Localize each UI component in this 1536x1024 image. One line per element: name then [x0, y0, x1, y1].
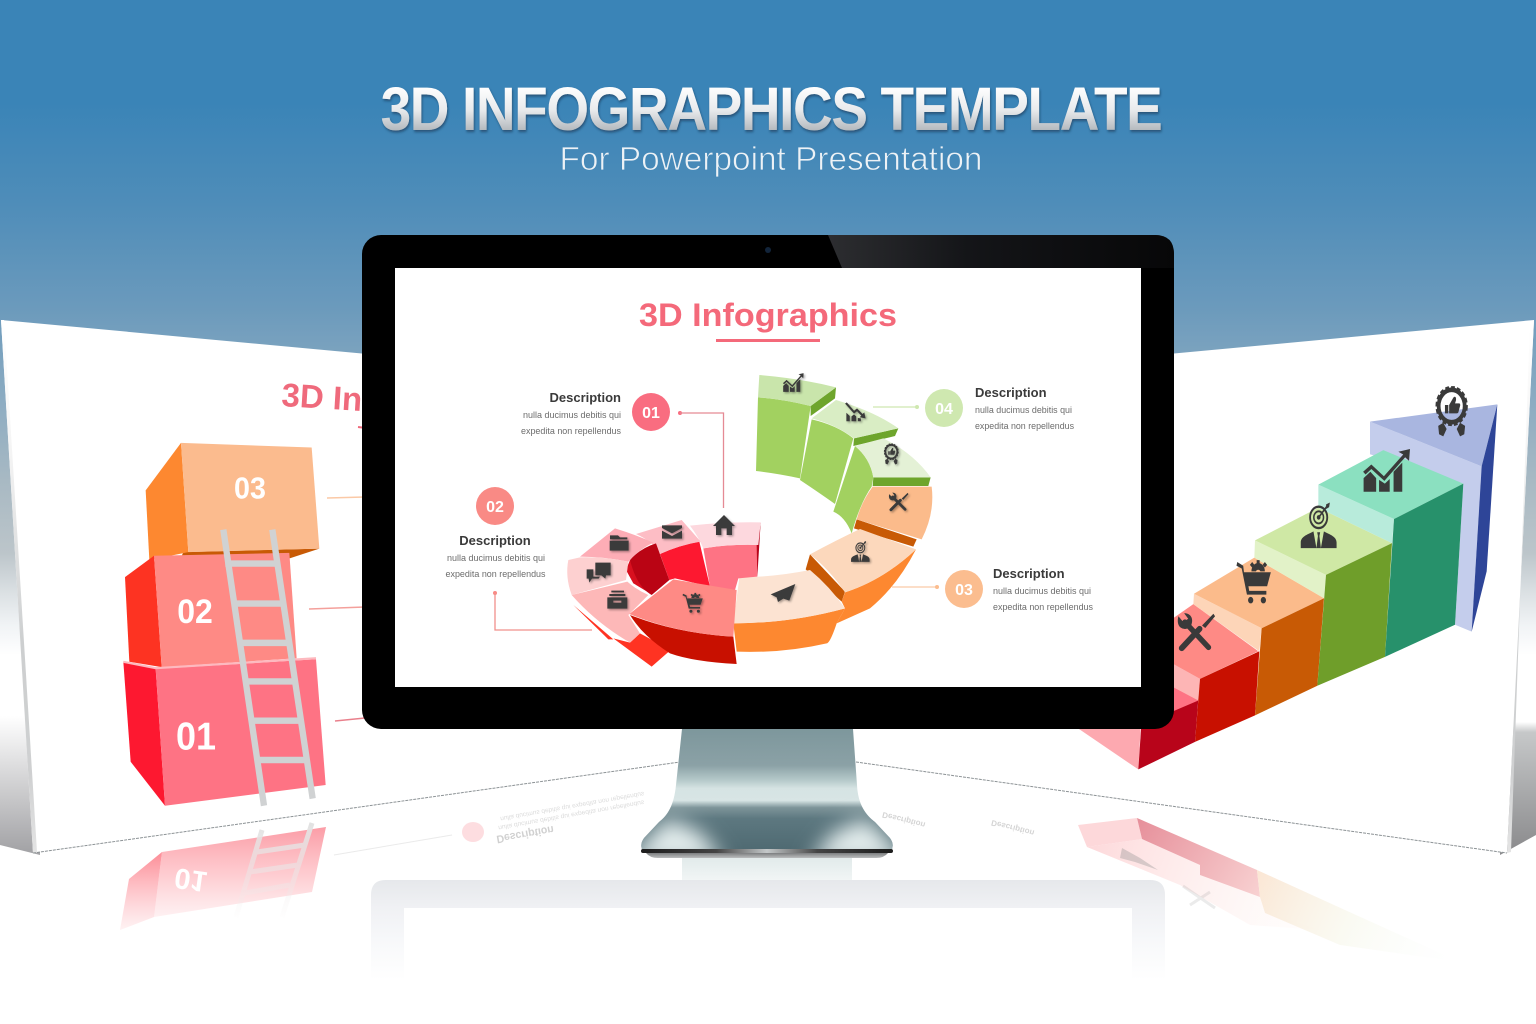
heading underline: [716, 339, 820, 342]
box 02: 02: [177, 593, 213, 631]
segment: green 2: [800, 400, 898, 504]
connector 04: [873, 405, 919, 409]
segment: red 6: [629, 579, 737, 664]
segment: red 1: [690, 522, 761, 590]
badge 02: [476, 487, 514, 525]
ring icon: drawer: [607, 591, 627, 609]
floor line right: [856, 762, 1507, 853]
description 03: [993, 566, 1093, 613]
connector 03: [892, 585, 939, 589]
badge 04: [925, 389, 963, 427]
stair icon: tools: [1178, 613, 1215, 648]
description 04: expedita non repellendus: [975, 421, 1074, 432]
floor line left: [33, 762, 680, 853]
ring icon: target person: [851, 541, 870, 562]
connector 02: [493, 591, 592, 630]
ring icon: house: [713, 515, 735, 535]
step 5: [1370, 404, 1497, 632]
monitor stand: [641, 729, 893, 858]
badge 01: [632, 393, 670, 431]
reflection: left description: nulla ducimus debitis qui expedita non repellendus: [500, 790, 645, 822]
segment: red 5: [572, 582, 671, 667]
reflection: left boxes: 01: [173, 861, 209, 897]
segment: red 4: [567, 557, 628, 595]
left panel shadow: [0, 716, 40, 855]
reflection: left description: Description: [495, 823, 555, 845]
subtitle: For Powerpoint Presentation: [560, 140, 982, 177]
box 01: 01: [176, 714, 216, 758]
box 03: [146, 443, 319, 560]
ring icon: folder: [610, 535, 629, 551]
description 03: Description: [993, 566, 1065, 581]
segment: orange 2: [806, 529, 916, 623]
description 01: Description: [549, 390, 621, 405]
stacked boxes chart: [123, 443, 326, 806]
reflection: right description: [881, 810, 1035, 837]
step 4: [1318, 422, 1482, 657]
title: 3D INFOGRAPHICS TEMPLATE: [381, 75, 1161, 144]
stair icon: growth chart: [1363, 449, 1410, 492]
description 03: nulla ducimus debitis qui: [993, 586, 1091, 597]
slide heading: 3D Infographics: [639, 297, 897, 333]
ring icon: tools: [889, 493, 908, 510]
segment: red 2: [636, 520, 710, 587]
badge 04: 04: [935, 401, 953, 418]
reflection: right description: Description: [990, 818, 1035, 837]
ring icon: growth chart: [783, 373, 804, 392]
description 04: [975, 385, 1074, 432]
description 02: nulla ducimus debitis qui: [447, 553, 545, 564]
connector 01: [678, 411, 724, 508]
badge 03: 03: [955, 582, 973, 599]
ring icon: cart: [683, 593, 703, 613]
left slide heading: 3D Infographics: [281, 376, 532, 428]
segment: orange 3: [733, 570, 845, 652]
reflection: left boxes: [120, 823, 326, 930]
segment: red 3: [580, 528, 669, 595]
reflection: left description: nulla ducimus debitis qui expedita non repellendus: [498, 798, 645, 831]
left slide connector lines: [309, 427, 366, 721]
right slide panel: [836, 320, 1534, 853]
segment: green 1: [756, 375, 836, 478]
description 01: [521, 390, 621, 437]
step 0: [1070, 685, 1198, 769]
left slide panel: [1, 320, 700, 853]
stair icon: cart: [1236, 560, 1271, 603]
stair icon: target person: [1301, 503, 1337, 548]
ladder: [223, 530, 313, 806]
stair icon: award badge: [1437, 387, 1467, 436]
description 02: Description: [459, 533, 531, 548]
badge 01: 01: [642, 405, 660, 422]
ring icon: falling chart: [845, 402, 866, 421]
ring icon: award badge: [884, 444, 898, 464]
badge 02: 02: [486, 499, 504, 516]
staircase chart: [1070, 387, 1497, 769]
box 01: [123, 658, 326, 806]
badge 03: [945, 570, 983, 608]
reflection: monitor: [371, 880, 1165, 998]
reflection: stand: [682, 857, 852, 880]
right panel shadow: [1500, 722, 1536, 855]
segment: green 3: [833, 438, 931, 533]
ring icon: chat bubbles: [587, 563, 611, 583]
description 04: nulla ducimus debitis qui: [975, 405, 1072, 416]
description 02: expedita non repellendus: [446, 569, 546, 580]
segment: orange 1: [854, 487, 932, 547]
box 03: 03: [234, 472, 266, 506]
3D ring chart: [567, 373, 932, 667]
monitor: [362, 235, 1174, 729]
description 03: expedita non repellendus: [993, 602, 1093, 613]
reflection: right stairs: [1078, 818, 1460, 962]
screen: [395, 268, 1141, 687]
webcam: [765, 247, 771, 253]
ring icon: envelope: [662, 525, 682, 539]
description 04: Description: [975, 385, 1047, 400]
reflection: right description: Description: [881, 810, 926, 829]
step 2: [1193, 558, 1324, 715]
ring icon: paper plane: [771, 584, 795, 602]
box 02: [125, 553, 297, 667]
description 02: [446, 533, 546, 580]
description 01: expedita non repellendus: [521, 426, 621, 437]
reflection: left description: [334, 790, 645, 855]
step 1: [1137, 604, 1259, 742]
step 3: [1254, 508, 1392, 686]
description 01: nulla ducimus debitis qui: [523, 410, 621, 421]
